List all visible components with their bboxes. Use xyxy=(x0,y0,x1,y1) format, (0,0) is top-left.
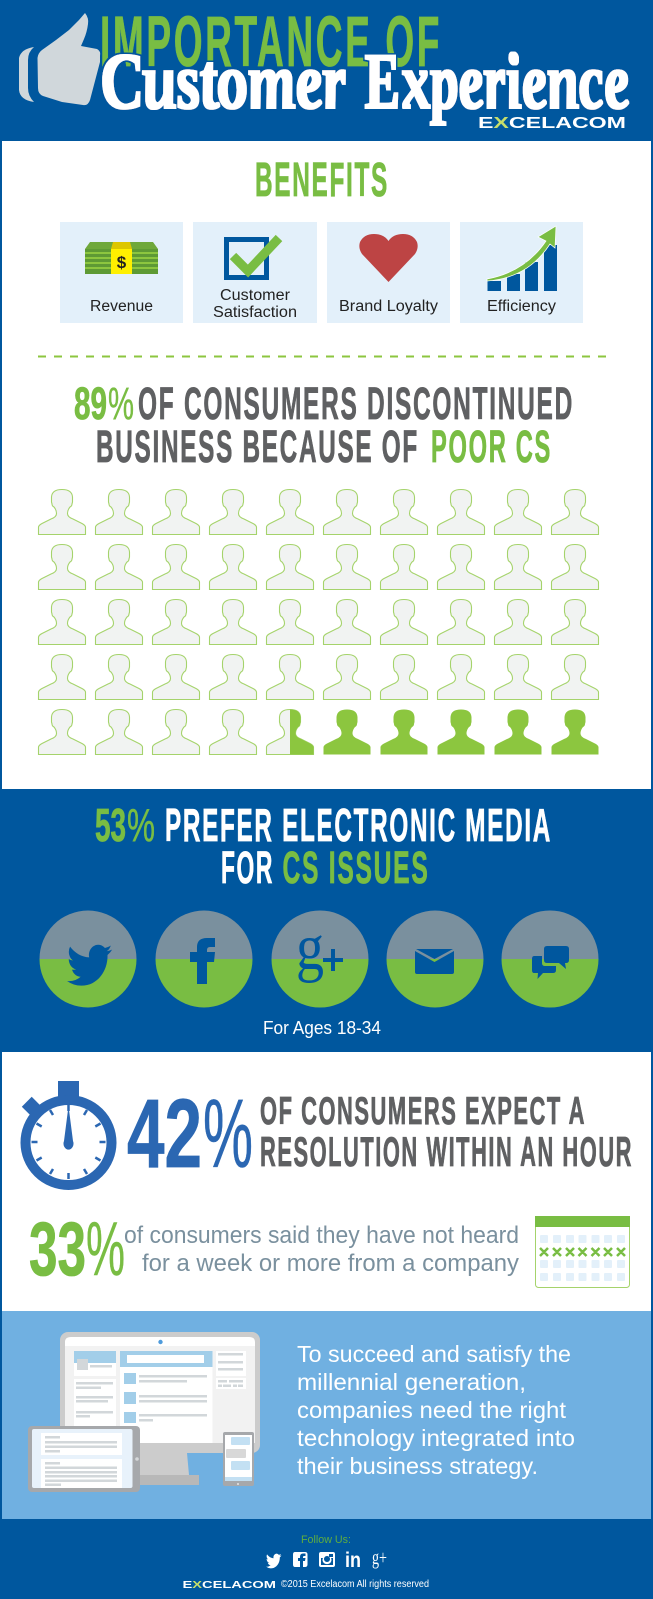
text block: closing statement: To succeed and satisfy the xyxy=(297,1341,571,1367)
icon: google plus circle: g xyxy=(296,911,324,984)
icon: mail circle xyxy=(386,911,484,1007)
chart: people pictogram xyxy=(38,490,598,754)
text block: closing statement: their business strategy. xyxy=(297,1453,538,1479)
icons: social row: in xyxy=(345,1549,361,1572)
icon: heart xyxy=(359,234,418,282)
footer xyxy=(182,1534,429,1591)
icon: facebook circle xyxy=(156,911,252,1007)
headline: 53 percent: 53 xyxy=(95,799,126,851)
icon: chat circle xyxy=(502,910,598,1008)
icon: stopwatch xyxy=(22,1081,112,1185)
headline: 53 percent: FOR xyxy=(221,842,274,893)
stat: 33 percent: 33 xyxy=(29,1207,86,1292)
title line 2 xyxy=(95,37,634,126)
illustration: devices xyxy=(28,1332,260,1492)
card: customer satisfaction: Customer xyxy=(220,287,290,304)
card: revenue: Revenue xyxy=(90,298,153,315)
card: brand loyalty: Brand Loyalty xyxy=(339,298,438,315)
icons: social row xyxy=(266,1547,387,1572)
headline: 89 percent xyxy=(74,378,574,472)
text block: closing statement: companies need the right xyxy=(297,1397,567,1423)
headline: 53 percent: CS ISSUES xyxy=(282,842,430,893)
monitor xyxy=(60,1332,260,1485)
stat: 33 percent: % xyxy=(86,1207,125,1292)
card: customer satisfaction xyxy=(193,222,317,323)
tablet xyxy=(28,1426,140,1492)
panel: benefits and poor cs xyxy=(2,141,651,789)
panel: millennials technology xyxy=(2,1311,651,1519)
card: efficiency xyxy=(460,222,583,323)
card: revenue xyxy=(60,222,183,323)
logo: excelacom: E X CELACOM xyxy=(478,115,626,132)
stat: 42 percent: 42 xyxy=(127,1079,202,1188)
headline: 53 percent: % xyxy=(127,799,155,851)
icon: calendar xyxy=(535,1216,630,1288)
icon: checkbox xyxy=(226,238,279,278)
icon: thumbs up xyxy=(19,13,100,105)
text block: closing statement: millennial generation, xyxy=(297,1369,526,1395)
panel: electronic media xyxy=(40,799,598,1038)
headline: 53 percent xyxy=(95,799,552,893)
headline: 89 percent: 89 xyxy=(74,378,107,429)
text block: closing statement xyxy=(297,1341,575,1479)
logo and copyright: ©2015 Excelacom All rights reserved xyxy=(281,1579,429,1590)
icon: money stack: $ xyxy=(117,253,127,272)
stat: 42 percent: % xyxy=(203,1079,253,1188)
icon: google plus circle xyxy=(272,910,368,1008)
logo and copyright xyxy=(182,1579,429,1591)
stat: 33 percent: for a week or more from a company xyxy=(142,1250,519,1277)
text: follow us: Follow Us: xyxy=(301,1534,351,1546)
stat: 33 percent: of consumers said they have not heard xyxy=(124,1222,519,1249)
title line 2: Customer xyxy=(95,37,352,126)
panel: response times xyxy=(2,1052,651,1311)
logo and copyright: E X CELACOM xyxy=(182,1580,276,1591)
stat: 33 percent xyxy=(29,1207,519,1292)
card: brand loyalty xyxy=(327,222,450,323)
stat: 42 percent xyxy=(127,1079,633,1188)
phone xyxy=(223,1432,254,1486)
card: customer satisfaction: Satisfaction xyxy=(213,304,297,321)
text block: closing statement: technology integrated into xyxy=(297,1425,575,1451)
icon: twitter circle xyxy=(40,911,136,1007)
icon: growth chart xyxy=(487,226,557,291)
caption: ages: For Ages 18-34 xyxy=(263,1018,381,1038)
card: efficiency: Efficiency xyxy=(487,298,556,315)
header xyxy=(19,3,634,132)
icons: social row: g+ xyxy=(372,1547,387,1569)
heading: benefits: BENEFITS xyxy=(255,154,389,207)
headline: 89 percent: % xyxy=(108,378,134,429)
